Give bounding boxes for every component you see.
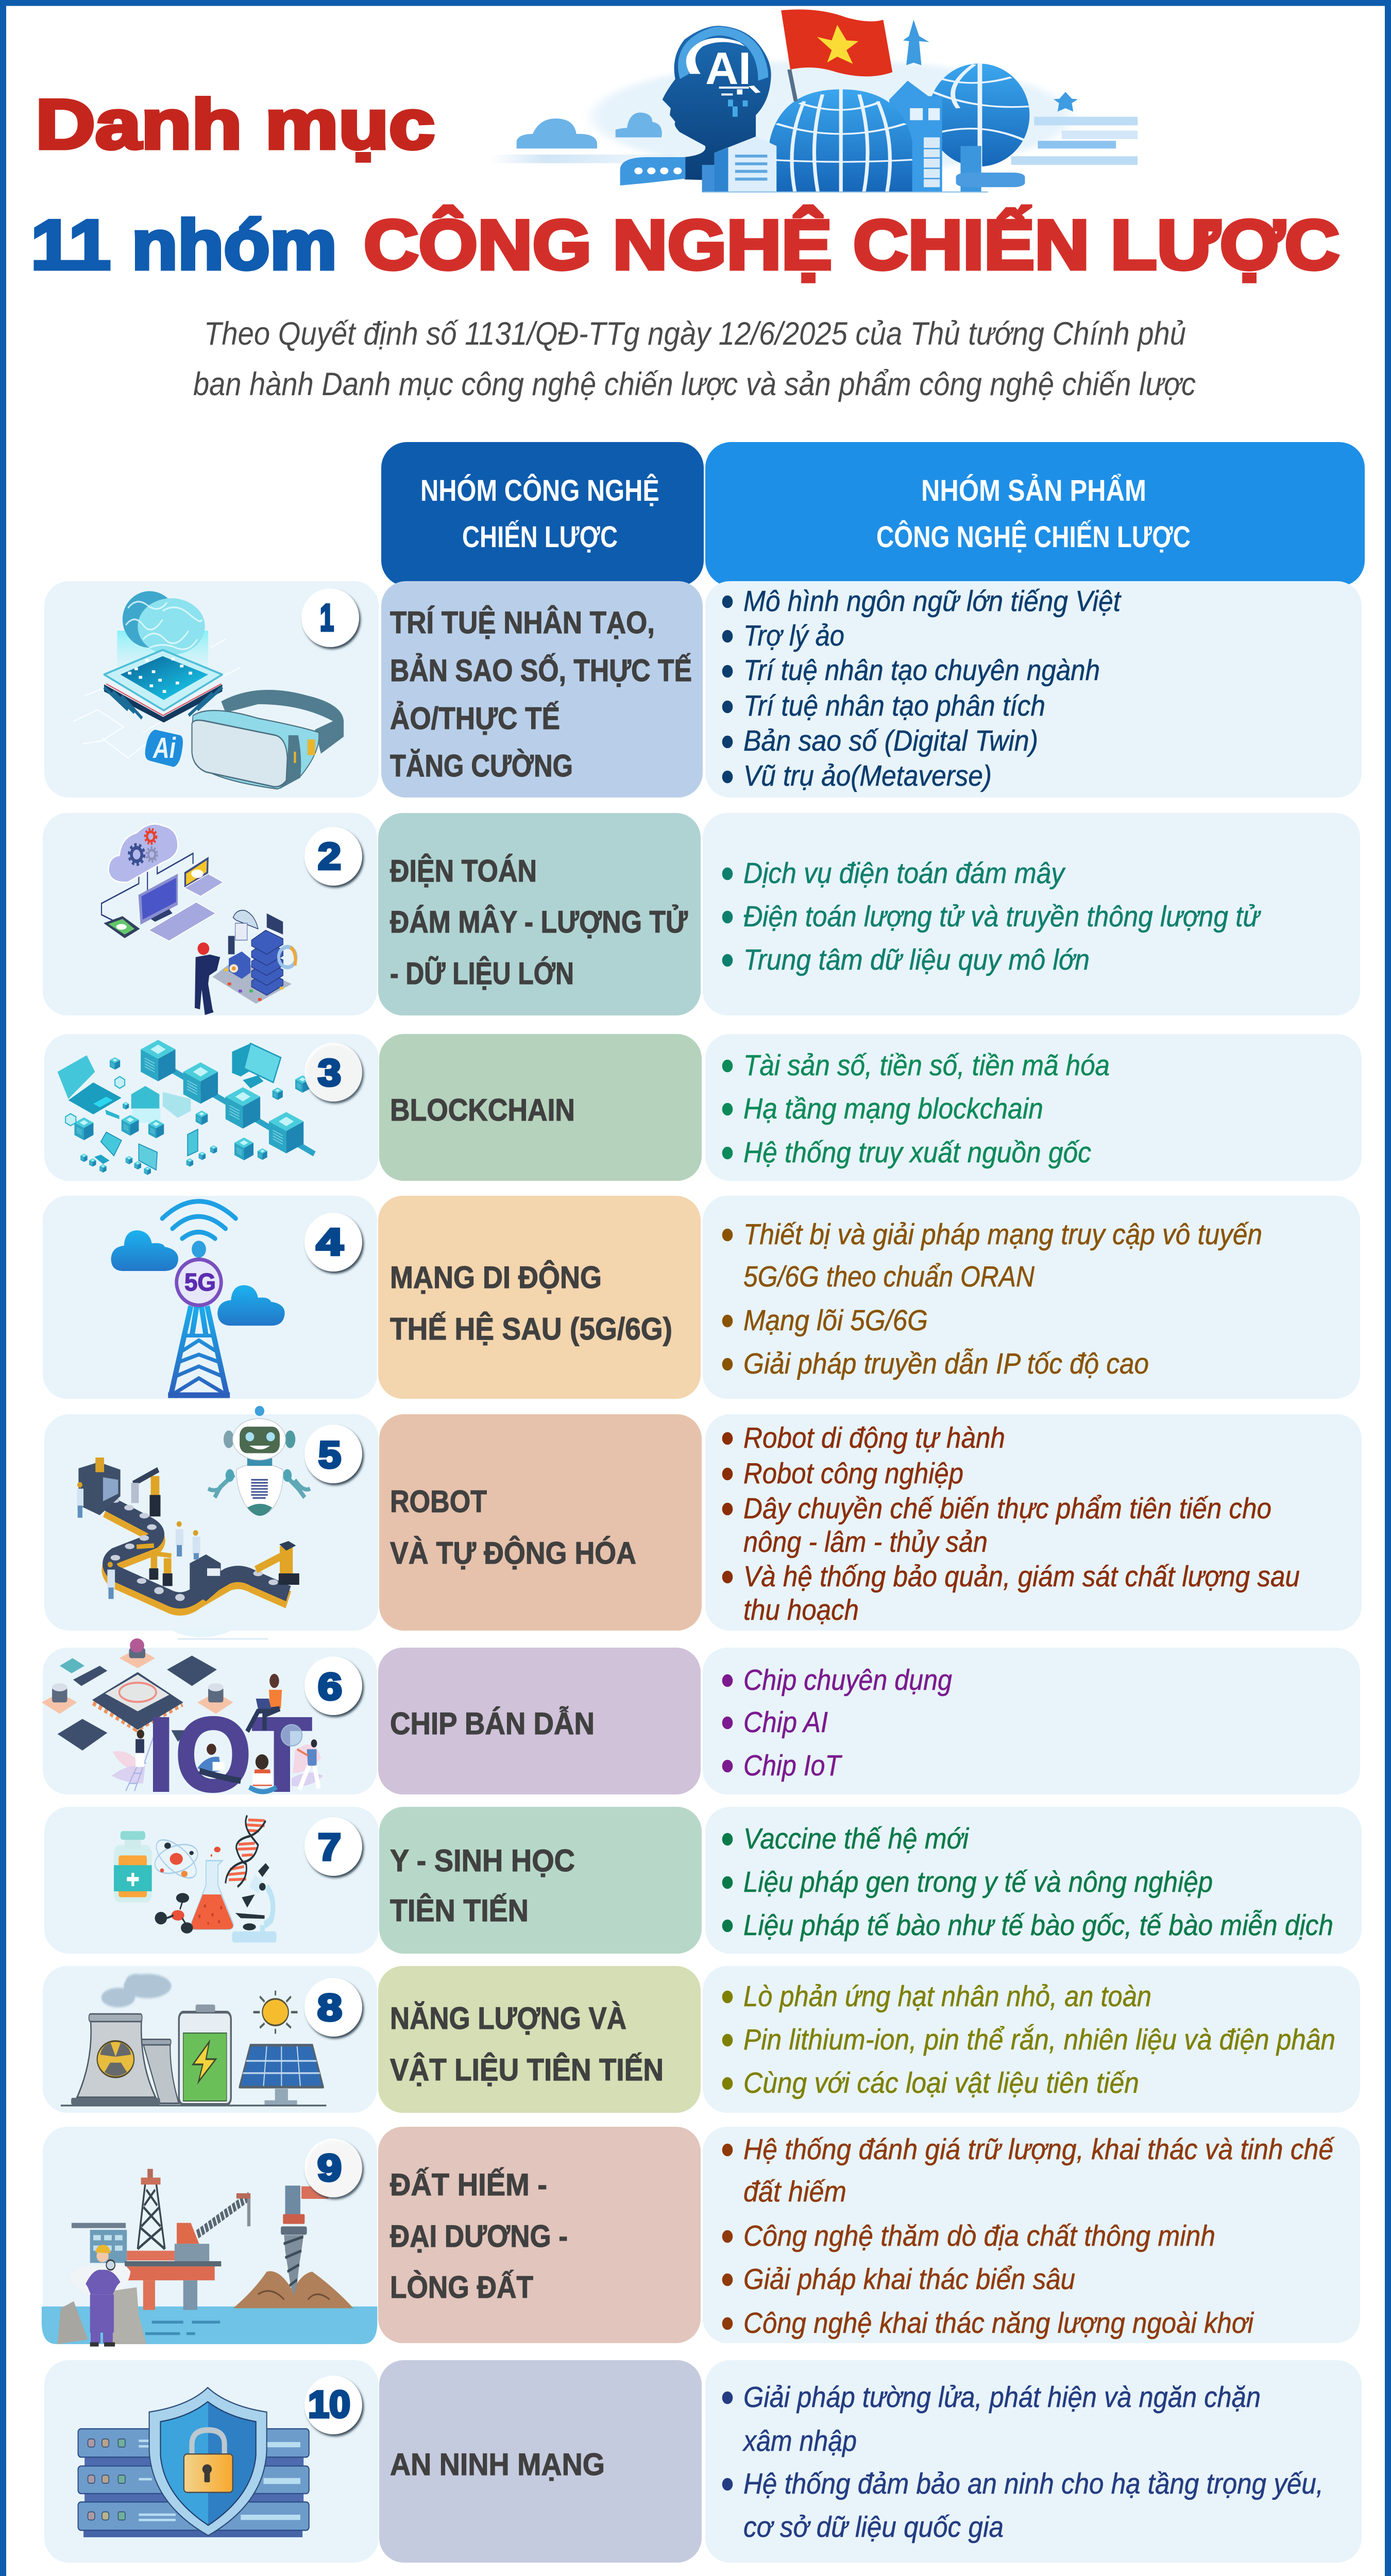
row 5: robots [44,1406,1362,1640]
product list: nông - lâm - thủy sản [743,1526,988,1558]
group title: VÀ TỰ ĐỘNG HÓA [390,1536,636,1570]
product list [722,1980,1335,2099]
icon: cloud, devices and servers [101,824,296,1015]
product list: Chip chuyên dụng [743,1664,952,1697]
product list: đất hiếm [743,2175,846,2208]
product list: Vaccine thế hệ mới [743,1822,969,1855]
group title: TIÊN TIẾN [390,1893,529,1928]
group title: TĂNG CƯỜNG [390,749,573,783]
product list: Trí tuệ nhân tạo phân tích [743,689,1045,722]
icon: offshore rig, drill and geologist [42,2169,377,2347]
product list: Robot di động tự hành [743,1421,1005,1454]
number badge: 5 [318,1434,341,1476]
group title: AN NINH MẠNG [390,2447,605,2482]
table header: product groups: NHÓM SẢN PHẨM [921,474,1146,507]
table header: technology groups [381,442,704,586]
group title: Y - SINH HỌC [390,1843,575,1878]
group title: ĐÁM MÂY - LƯỢNG TỬ [390,905,688,939]
group title [390,1260,672,1346]
table header: product groups [705,442,1365,586]
number badge: 4 [316,1222,344,1263]
product list [722,1218,1262,1380]
group title [390,2001,664,2087]
product list: Tài sản số, tiền số, tiền mã hóa [743,1049,1110,1082]
product list: Điện toán lượng tử và truyền thông lượng tử [743,900,1261,933]
group title: ROBOT [390,1484,487,1519]
table header: product groups: CÔNG NGHỆ CHIẾN LƯỢC [876,520,1191,554]
hero illustration: AI head, flag and globes [491,9,1138,193]
product list [722,1049,1110,1169]
product list: Dịch vụ điện toán đám mây [743,857,1066,890]
product list: Hệ thống đảm bảo an ninh cho hạ tầng trọng yếu, [743,2467,1324,2500]
icon: bottle, flask, DNA, microscope [114,1816,277,1942]
product list [722,1421,1300,1626]
product list [722,1664,952,1782]
group title [390,1843,575,1928]
group title: - DỮ LIỆU LỚN [390,956,574,991]
product list: Trí tuệ nhân tạo chuyên ngành [743,654,1100,687]
number badge: 8 [317,1987,342,2029]
title line 2: 11 nhóm [31,206,337,284]
product list: Trung tâm dữ liệu quy mô lớn [743,943,1090,976]
product list: cơ sở dữ liệu quốc gia [743,2511,1004,2544]
group title: BLOCKCHAIN [390,1093,575,1127]
group title: LÒNG ĐẤT [390,2270,533,2304]
number badge: 3 [318,1052,341,1094]
subtitle: ban hành Danh mục công nghệ chiến lược và sản phẩm công nghệ chiến lược [193,366,1196,402]
product list: Lò phản ứng hạt nhân nhỏ, an toàn [743,1980,1151,2013]
group title: MẠNG DI ĐỘNG [390,1260,602,1295]
product list: Giải pháp tường lửa, phát hiện và ngăn chặn [743,2381,1261,2414]
product list: Trợ lý ảo [743,619,844,652]
group title [390,1484,636,1570]
group title: THẾ HỆ SAU (5G/6G) [390,1312,672,1346]
row 1: AI [44,581,1362,798]
product list: Robot công nghiệp [743,1457,963,1490]
product list: Mô hình ngôn ngữ lớn tiếng Việt [743,585,1122,618]
icon: 5G tower [111,1201,285,1398]
product list: Mạng lõi 5G/6G [743,1304,928,1337]
row 6: semiconductor chips [42,1638,1360,1814]
group title: NĂNG LƯỢNG VÀ [390,2001,626,2036]
product list: Bản sao số (Digital Twin) [743,724,1038,757]
product list [722,857,1261,976]
title line 2 [31,206,1339,284]
product list: Công nghệ khai thác năng lượng ngoài khơi [743,2307,1254,2340]
row 2: cloud computing [43,813,1360,1015]
icon: blockchain cubes [58,1040,314,1175]
number badge: 6 [318,1666,342,1708]
product list: Thiết bị và giải pháp mạng truy cập vô tuyến [743,1218,1262,1251]
number badge [304,1043,362,1101]
group title: ẢO/THỰC TẾ [390,701,560,736]
product list: Chip AI [743,1706,828,1739]
number badge: 9 [317,2147,342,2189]
product list: 5G/6G theo chuẩn ORAN [743,1260,1035,1293]
group title: TRÍ TUỆ NHÂN TẠO, [390,605,655,640]
icon: brain chip and VR headset [74,591,344,789]
number badge: 7 [318,1826,341,1868]
title line 1: Danh mục [36,85,435,163]
product list: Liệu pháp gen trong y tế và nông nghiệp [743,1866,1213,1899]
product list [722,585,1122,792]
product list: Và hệ thống bảo quản, giám sát chất lượng sau [743,1560,1300,1593]
number badge [304,2376,362,2434]
product list: Vũ trụ ảo(Metaverse) [743,759,992,792]
table header: technology groups: CHIẾN LƯỢC [462,520,618,554]
number badge [304,1817,362,1876]
product list: Liệu pháp tế bào như tế bào gốc, tế bào miễn dịch [743,1909,1333,1942]
product list: Hệ thống đánh giá trữ lượng, khai thác và tinh chế [743,2133,1335,2166]
icon: reactor, battery, sun, solar panel [61,1974,326,2106]
subtitle: Theo Quyết định số 1131/QĐ-TTg ngày 12/6/2025 của Thủ tướng Chính phủ [204,316,1186,352]
table header: technology groups: NHÓM CÔNG NGHỆ [420,474,659,507]
product list: thu hoạch [743,1594,859,1626]
group title: ĐIỆN TOÁN [390,854,537,888]
subtitle [193,316,1196,402]
label: IoT letters: IOT [147,1696,312,1814]
product list: Giải pháp truyền dẫn IP tốc độ cao [743,1347,1149,1380]
row 3: blockchain [44,1034,1362,1181]
number badge [301,588,359,647]
group title [390,2167,568,2304]
product list [722,2381,1324,2544]
product list: Pin lithium-ion, pin thể rắn, nhiên liệu và điện phân [743,2023,1335,2056]
row 7: biomedical [44,1807,1362,1954]
hero illustration: AI head, flag and globes: AI [705,43,751,94]
product list: Giải pháp khai thác biển sâu [743,2263,1075,2296]
group title [390,605,692,783]
label: Ai tile: Ai [152,732,176,765]
product list: Chip IoT [743,1749,843,1782]
group title: CHIP BÁN DẪN [390,1706,595,1741]
product list: Dây chuyền chế biến thực phẩm tiên tiến cho [743,1492,1271,1525]
row 10: cyber security [44,2360,1362,2563]
number badge [304,1425,362,1483]
number badge [304,1213,362,1272]
icon: shield, padlock and server rack [78,2387,309,2537]
product list: Công nghệ thăm dò địa chất thông minh [743,2219,1215,2252]
number badge [304,2139,362,2197]
row 9: rare earths, ocean, underground [42,2127,1360,2347]
product list: Hạ tầng mạng blockchain [743,1092,1043,1125]
number badge: 2 [318,836,341,877]
number badge: 1 [320,597,334,639]
icon: chips and IoT [42,1638,323,1814]
group title: ĐẤT HIẾM - [390,2167,547,2202]
product list [722,1822,1333,1942]
row 4: 5G/6G [43,1196,1360,1399]
group title: BẢN SAO SỐ, THỰC TẾ [390,653,692,688]
label: 5G: 5G [184,1269,216,1296]
number badge: 10 [308,2384,350,2426]
product list: Cùng với các loại vật liệu tiên tiến [743,2066,1139,2099]
product list [722,2133,1335,2340]
product list: xâm nhập [742,2425,857,2458]
people [197,1674,319,1792]
group title: VẬT LIỆU TIÊN TIẾN [390,2053,664,2087]
number badge [304,1656,362,1715]
product list: Hệ thống truy xuất nguồn gốc [743,1136,1091,1169]
row 8: energy and materials [43,1966,1360,2113]
icon: production line and robot [77,1406,310,1640]
number badge [304,827,362,886]
group title: ĐẠI DƯƠNG - [390,2219,568,2253]
group title [390,854,688,991]
number badge [304,1978,362,2037]
title line 2: CÔNG NGHỆ CHIẾN LƯỢC [364,206,1339,284]
